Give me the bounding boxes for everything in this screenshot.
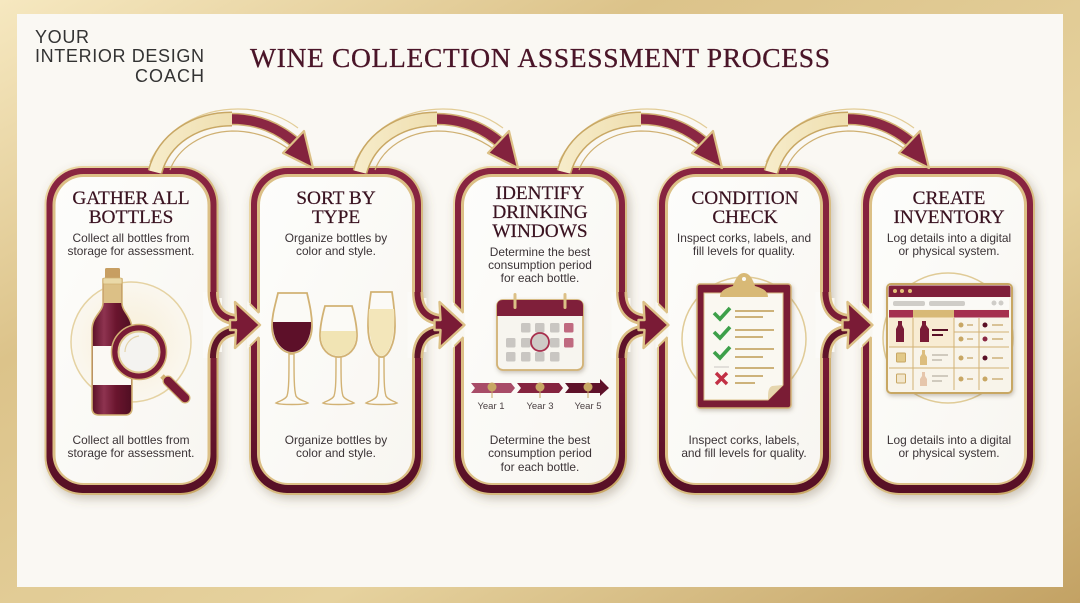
timeline arrow with years: Year 5 xyxy=(574,401,602,412)
heading: CHECK xyxy=(712,207,778,228)
icon: clipboard checklist xyxy=(682,273,806,408)
description top: fill levels for quality. xyxy=(693,244,795,258)
description top: for each bottle. xyxy=(501,271,579,285)
side arrow 2 to 3 xyxy=(408,292,464,358)
icon: three wine glasses xyxy=(272,292,397,404)
side arrow 4 to 5 xyxy=(816,292,872,358)
logo text: YOUR xyxy=(35,27,89,47)
description bottom: Organize bottles by xyxy=(285,433,387,447)
heading: WINDOWS xyxy=(492,221,588,242)
description top: Collect all bottles from xyxy=(73,231,190,245)
description top: consumption period xyxy=(488,258,592,272)
card frame 5 xyxy=(861,166,1035,495)
heading: GATHER ALL xyxy=(72,188,190,209)
description bottom: storage for assessment. xyxy=(68,446,194,460)
timeline arrow with years: Year 3 xyxy=(526,401,554,412)
logo text xyxy=(35,27,204,86)
description bottom: Collect all bottles from xyxy=(73,433,190,447)
card frame 4 xyxy=(657,166,831,495)
description top: Log details into a digital xyxy=(887,231,1011,245)
heading: CREATE xyxy=(913,188,985,209)
logo text: COACH xyxy=(135,66,204,86)
description top: or physical system. xyxy=(898,244,1000,258)
description bottom: Inspect corks, labels, xyxy=(688,433,800,447)
description top: storage for assessment. xyxy=(68,244,194,258)
title: WINE COLLECTION ASSESSMENT PROCESS xyxy=(250,42,830,73)
heading: BOTTLES xyxy=(89,207,173,228)
card frame 2 xyxy=(249,166,423,495)
card frame 1 xyxy=(44,166,218,495)
icon: bottle and magnifier xyxy=(71,268,191,415)
description top: Inspect corks, labels, and xyxy=(677,231,811,245)
description bottom: or physical system. xyxy=(898,446,1000,460)
top arrow 1 to 2 xyxy=(150,109,313,172)
panel: identify drinking windows xyxy=(471,183,609,474)
heading: TYPE xyxy=(312,207,360,228)
top arrow 4 to 5 xyxy=(766,109,929,172)
logo text: INTERIOR DESIGN xyxy=(35,46,204,66)
panel: condition check xyxy=(677,188,811,460)
description top: color and style. xyxy=(296,244,376,258)
timeline arrow with years xyxy=(471,379,609,412)
side arrow 3 to 4 xyxy=(612,292,668,358)
description bottom: and fill levels for quality. xyxy=(681,446,807,460)
heading: CONDITION xyxy=(691,188,799,209)
heading: SORT BY xyxy=(296,188,376,209)
heading: DRINKING xyxy=(492,202,588,223)
description bottom: consumption period xyxy=(488,446,592,460)
side arrow 1 to 2 xyxy=(203,292,260,358)
panel: create inventory xyxy=(883,188,1013,460)
description top: Determine the best xyxy=(490,245,591,259)
timeline arrow with years: Year 1 xyxy=(477,401,505,412)
description bottom: Log details into a digital xyxy=(887,433,1011,447)
panel: sort by type xyxy=(272,188,397,460)
description bottom: Determine the best xyxy=(490,433,591,447)
heading: IDENTIFY xyxy=(496,183,585,204)
panel: gather all bottles xyxy=(68,188,194,460)
description bottom: color and style. xyxy=(296,446,376,460)
card frame 3 xyxy=(453,166,627,495)
heading: INVENTORY xyxy=(893,207,1005,228)
description top: Organize bottles by xyxy=(285,231,387,245)
top arrow 2 to 3 xyxy=(355,109,518,172)
top arrow 3 to 4 xyxy=(559,109,722,172)
icon: inventory spreadsheet xyxy=(883,273,1013,403)
description bottom: for each bottle. xyxy=(501,460,579,474)
icon: calendar xyxy=(497,293,583,370)
